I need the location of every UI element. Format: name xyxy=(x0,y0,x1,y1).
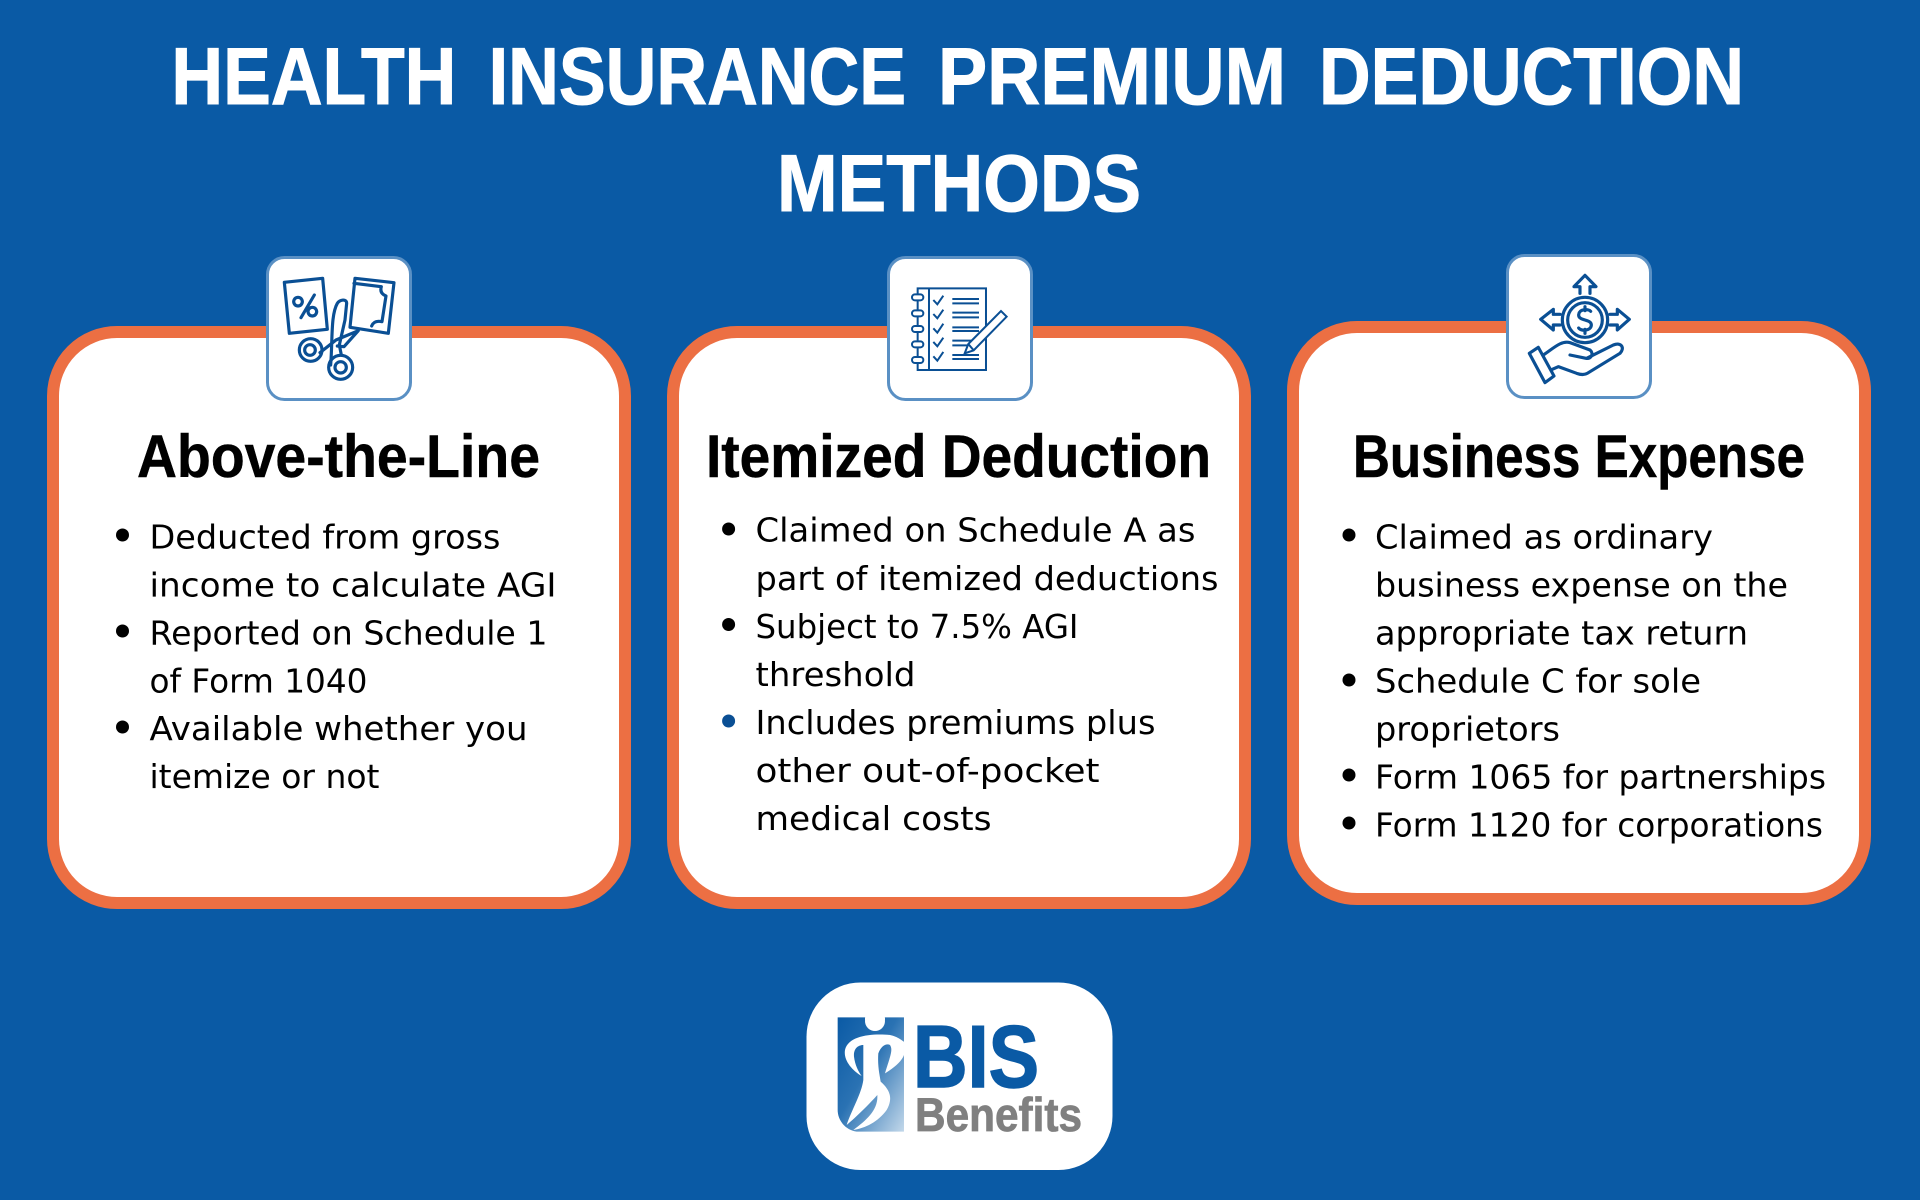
logo: BIS Benefits xyxy=(806,982,1112,1170)
title: HEALTH xyxy=(171,32,456,122)
bullet list: part of itemized deductions xyxy=(756,559,1218,598)
icon: runner shield xyxy=(838,1011,904,1132)
heading: Itemized Deduction xyxy=(706,423,1211,490)
title xyxy=(171,32,1744,229)
title: INSURANCE xyxy=(489,32,906,122)
bullet list xyxy=(1342,518,1826,844)
panel: above-the-line xyxy=(53,258,625,903)
bullet list: itemize or not xyxy=(150,757,380,796)
bullet list xyxy=(116,518,556,796)
bullet list: medical costs xyxy=(756,799,992,838)
bullet list: Reported on Schedule 1 xyxy=(150,614,548,652)
bullet list: other out-of-pocket xyxy=(756,751,1100,790)
logo wordmark BIS: BIS xyxy=(913,1007,1039,1106)
bullet list: Schedule C for sole xyxy=(1375,662,1701,700)
bullet list xyxy=(722,510,1218,838)
title: DEDUCTION xyxy=(1319,32,1744,122)
bullet list: proprietors xyxy=(1375,710,1560,748)
panel: itemized deduction xyxy=(673,258,1245,903)
icon box: checklist xyxy=(888,258,1032,400)
bullet list: Available whether you xyxy=(150,709,528,748)
bullet list: Deducted from gross xyxy=(150,518,500,556)
panel: business expense xyxy=(1293,256,1865,899)
bullet list: threshold xyxy=(756,655,916,694)
heading: Above-the-Line xyxy=(137,423,540,490)
bullet list: Claimed as ordinary xyxy=(1375,518,1713,556)
icon box: hand with coin xyxy=(1508,256,1650,398)
bullet list: of Form 1040 xyxy=(150,662,368,700)
bullet list: Subject to 7.5% AGI xyxy=(756,607,1078,646)
bullet list: Claimed on Schedule A as xyxy=(756,510,1196,550)
title: PREMIUM xyxy=(938,32,1286,122)
bullet list: Form 1120 for corporations xyxy=(1375,806,1823,844)
bullet list: business expense on the xyxy=(1375,566,1788,604)
title: METHODS xyxy=(777,139,1141,229)
bullet list: Form 1065 for partnerships xyxy=(1375,758,1826,796)
bullet list: income to calculate AGI xyxy=(150,566,556,604)
bullet list: Includes premiums plus xyxy=(756,703,1156,742)
heading: Business Expense xyxy=(1353,423,1805,490)
bullet list: appropriate tax return xyxy=(1375,614,1748,652)
icon box: scissors xyxy=(268,258,410,400)
logo wordmark Benefits: Benefits xyxy=(915,1088,1082,1141)
